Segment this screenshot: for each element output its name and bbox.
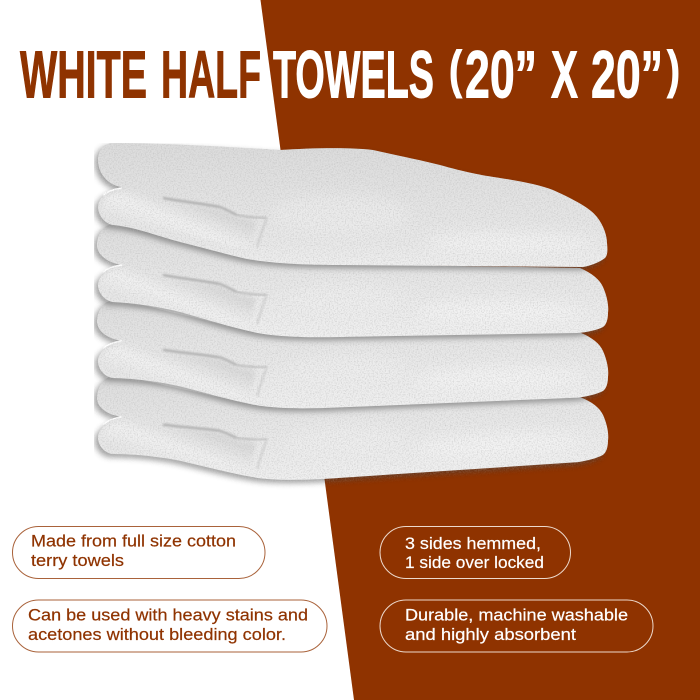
title: 20” <box>591 38 663 113</box>
title: HALF <box>161 38 261 113</box>
callout: heavy stains <box>12 600 327 652</box>
towel 4 (bottom) <box>94 352 608 493</box>
title: TOWELS <box>273 38 434 113</box>
callout: durable <box>380 600 653 652</box>
callout: hemmed sides: 3 sides hemmed, <box>405 535 541 553</box>
towel stack illustration <box>94 143 608 493</box>
title: ) <box>667 41 680 99</box>
callout: cotton terry: terry towels <box>31 552 124 570</box>
title: ( <box>449 41 463 99</box>
callout: heavy stains: Can be used with heavy stains and <box>28 606 308 624</box>
callout: cotton terry: Made from full size cotton <box>31 533 236 551</box>
callout: heavy stains: acetones without bleeding color. <box>28 626 286 644</box>
callout: durable: and highly absorbent <box>405 626 576 644</box>
title <box>20 38 680 113</box>
callout: cotton terry <box>12 526 265 578</box>
towel 3 <box>94 288 608 417</box>
callout: hemmed sides: 1 side over locked <box>405 554 544 572</box>
callout: hemmed sides <box>380 526 570 578</box>
background: brown diagonal panel <box>260 0 700 700</box>
callout: durable: Durable, machine washable <box>405 606 628 624</box>
towel 2 <box>94 224 608 340</box>
title: 20” <box>465 38 537 113</box>
towel 1 (top towel) <box>95 143 607 270</box>
title: X <box>551 38 578 113</box>
title: WHITE <box>20 38 147 113</box>
